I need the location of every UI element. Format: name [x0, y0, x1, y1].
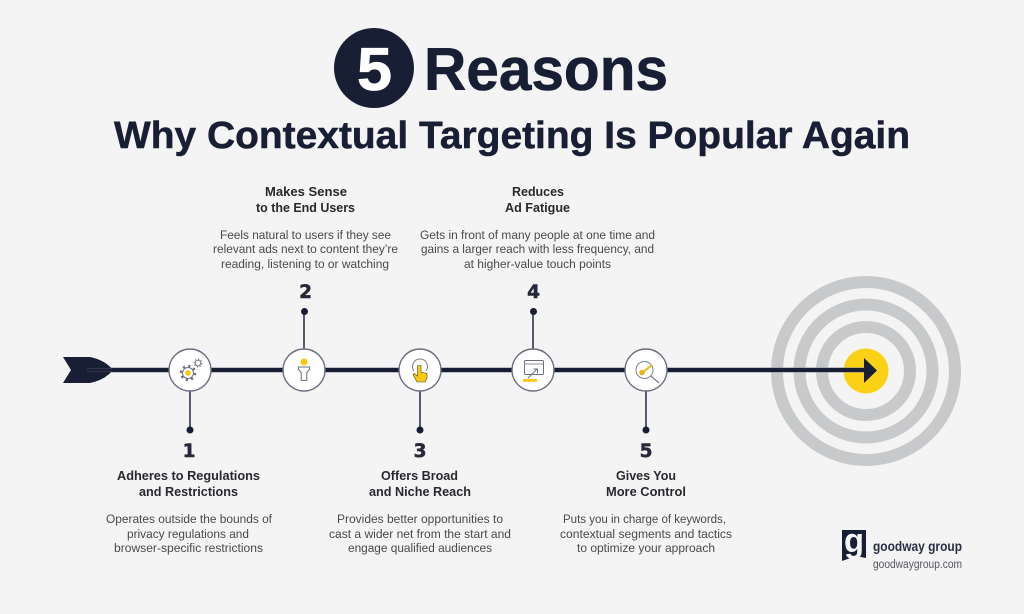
- item 2: [213, 184, 398, 303]
- stem 4: [530, 308, 537, 349]
- icon: pointing hand: [399, 349, 441, 391]
- stem 1: [186, 391, 194, 434]
- stem 2: [301, 308, 308, 349]
- item 1: 1: [183, 441, 195, 462]
- stem 3: [416, 391, 424, 434]
- item 5: [560, 441, 732, 555]
- item 3: and Niche Reach: [369, 484, 471, 499]
- item 5: contextual segments and tactics: [560, 527, 732, 541]
- item 1: and Restrictions: [139, 484, 238, 499]
- item 4: Ad Fatigue: [505, 200, 570, 215]
- item 4: at higher-value touch points: [464, 257, 611, 271]
- item 3: cast a wider net from the start and: [329, 527, 511, 541]
- item 1: Operates outside the bounds of: [106, 512, 273, 526]
- item 3: engage qualified audiences: [348, 541, 492, 555]
- item 2: relevant ads next to content they’re: [213, 242, 398, 256]
- icon: person funnel: [283, 349, 325, 391]
- title: Reasons: [424, 36, 668, 103]
- item 1: Adheres to Regulations: [117, 468, 260, 483]
- title: 5: [357, 36, 392, 103]
- item 4: Reduces: [512, 184, 564, 199]
- item 5: Gives You: [616, 468, 676, 483]
- target: [777, 282, 955, 460]
- icon: gears: [169, 349, 211, 391]
- logo: [842, 522, 962, 571]
- item 4: Gets in front of many people at one time and: [420, 228, 655, 242]
- item 4: gains a larger reach with less frequency, and: [421, 242, 654, 256]
- logo: g: [844, 522, 864, 560]
- item 3: Offers Broad: [381, 468, 458, 483]
- item 1: privacy regulations and: [127, 527, 249, 541]
- stem 5: [642, 391, 650, 434]
- item 2: Feels natural to users if they see: [220, 228, 391, 242]
- item 1: browser-specific restrictions: [114, 541, 263, 555]
- item 5: to optimize your approach: [577, 541, 715, 555]
- item 5: 5: [640, 441, 652, 462]
- item 2: reading, listening to or watching: [221, 257, 389, 271]
- item 4: 4: [527, 282, 540, 303]
- icon: browser window: [512, 349, 554, 391]
- logo: goodwaygroup.com: [873, 559, 962, 571]
- logo: goodway group: [873, 539, 962, 554]
- item 2: 2: [299, 282, 312, 303]
- item 3: [329, 441, 511, 555]
- timeline arrow: [63, 357, 877, 383]
- item 1: [106, 441, 273, 555]
- item 4: [420, 184, 655, 303]
- title: [114, 28, 910, 157]
- item 2: to the End Users: [256, 200, 355, 215]
- title: Why Contextual Targeting Is Popular Again: [114, 115, 910, 157]
- item 5: Puts you in charge of keywords,: [563, 512, 726, 526]
- item 2: Makes Sense: [265, 184, 347, 199]
- item 5: More Control: [606, 484, 686, 499]
- item 3: Provides better opportunities to: [337, 512, 503, 526]
- icon: key magnifier: [625, 349, 667, 391]
- item 3: 3: [414, 441, 426, 462]
